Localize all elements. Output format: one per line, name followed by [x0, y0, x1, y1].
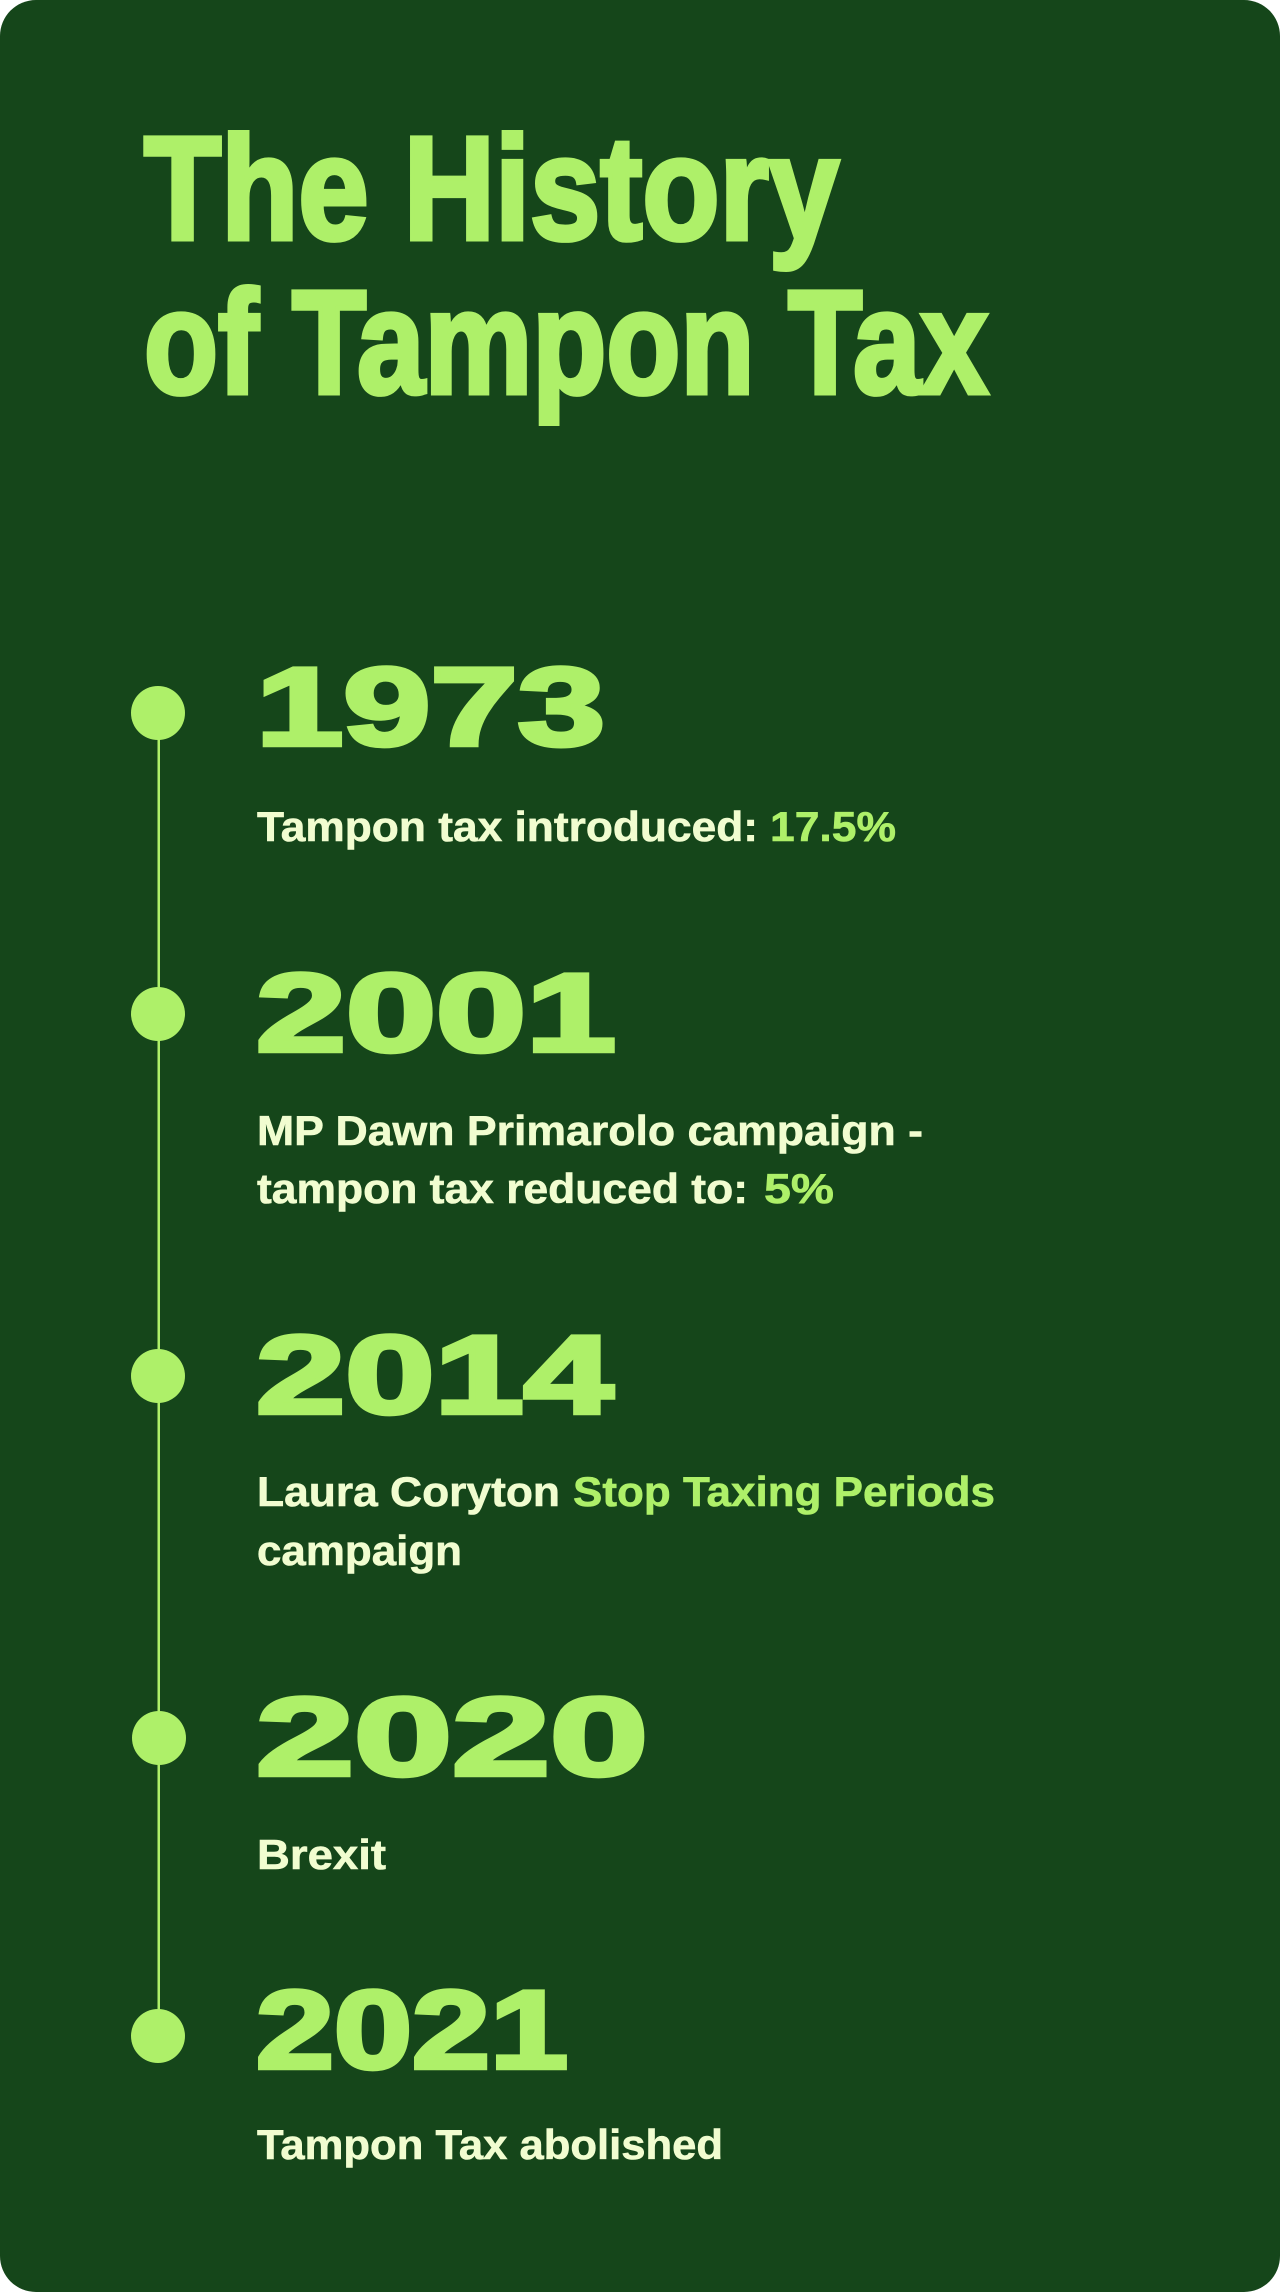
timeline	[131, 686, 186, 2063]
entry: 1973: 17.5%	[770, 803, 896, 850]
marker 2001	[131, 987, 185, 1041]
entry: 2014: 2014	[256, 1313, 613, 1437]
entry: 2001: 2001	[256, 951, 616, 1075]
entry: 2001: tampon tax reduced to:	[257, 1165, 748, 1212]
entry: 2021: Tampon Tax abolished	[257, 2121, 723, 2168]
entry: 2014: Laura Coryton	[257, 1468, 560, 1515]
entry: 1973: 1973	[256, 645, 605, 769]
entry: 2001	[256, 951, 923, 1212]
title: The History	[144, 107, 839, 271]
entry: 1973: Tampon tax introduced:	[257, 803, 758, 850]
entry: 2014: Stop Taxing Periods	[573, 1468, 995, 1515]
entry: 2020: 2020	[256, 1675, 648, 1799]
title	[144, 107, 988, 425]
entry: 2001: MP Dawn Primarolo campaign -	[257, 1107, 923, 1154]
entry: 2001: 5%	[764, 1165, 834, 1212]
entry: 2014	[256, 1313, 995, 1574]
entry: 2020: Brexit	[257, 1831, 386, 1878]
entry: 1973	[256, 645, 896, 850]
marker 2020	[132, 1711, 186, 1765]
entry: 2020	[256, 1675, 648, 1878]
marker 1973	[131, 686, 185, 740]
timeline line	[158, 713, 160, 2036]
marker 2014	[131, 1349, 185, 1403]
entry: 2021	[256, 1968, 723, 2168]
title: of Tampon Tax	[144, 261, 988, 425]
entry: 2021: 2021	[256, 1968, 568, 2092]
marker 2021	[131, 2009, 185, 2063]
entry: 2014: campaign	[257, 1527, 462, 1574]
